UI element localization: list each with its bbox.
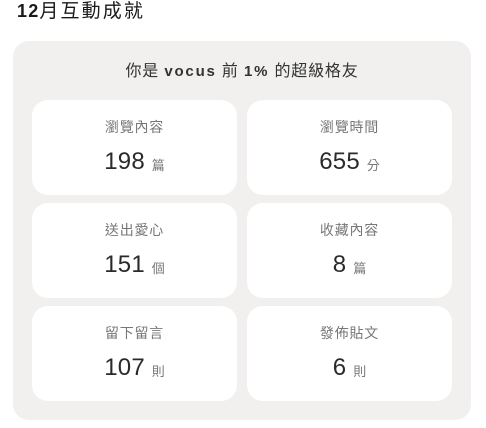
card: comments left	[32, 306, 237, 401]
label: 送出愛心	[105, 222, 164, 238]
subtitle: 你是 vocus 前 1% 的超級格友	[125, 63, 359, 80]
value: 107 則	[104, 354, 165, 381]
label: 發佈貼文	[320, 325, 379, 341]
label: 留下留言	[105, 325, 164, 341]
value: 6 則	[333, 354, 366, 381]
label: 瀏覽時間	[320, 119, 379, 135]
card: posts published	[247, 306, 452, 401]
label: 瀏覽內容	[105, 119, 164, 135]
label: 收藏內容	[320, 222, 379, 238]
title: 12月互動成就	[17, 1, 145, 22]
value: 655 分	[319, 148, 380, 175]
card: hearts sent	[32, 203, 237, 298]
value: 151 個	[104, 251, 165, 278]
value: 198 篇	[104, 148, 165, 175]
value: 8 篇	[333, 251, 366, 278]
card: pages viewed	[32, 100, 237, 195]
card: saved content	[247, 203, 452, 298]
card: viewing time	[247, 100, 452, 195]
